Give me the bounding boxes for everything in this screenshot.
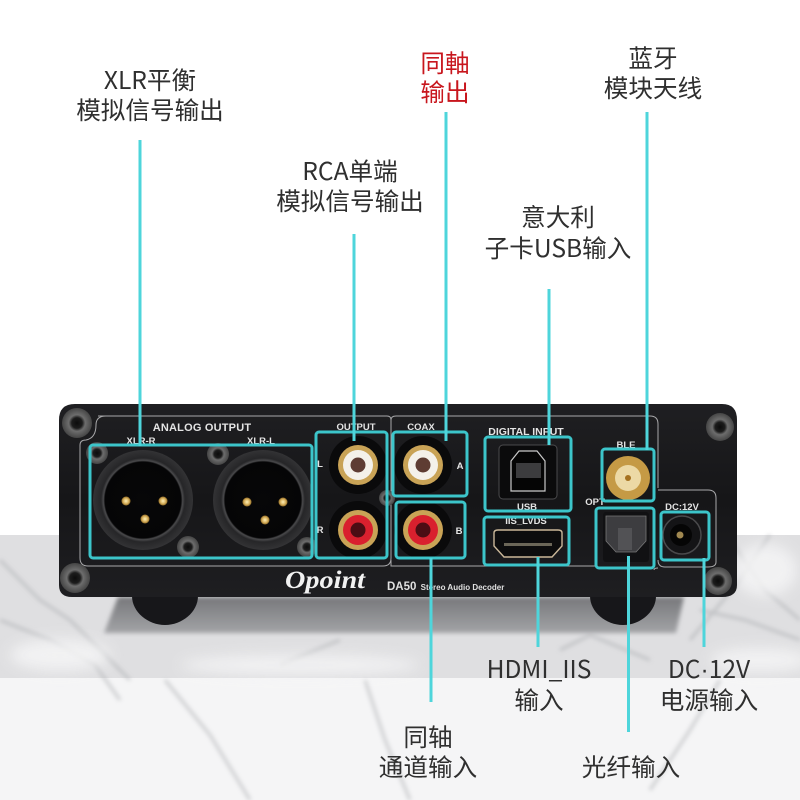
label: coaxial output: 同軸 [420, 44, 470, 80]
panel label: XLR-R: XLR-R [126, 436, 156, 447]
highlight box: USB [485, 437, 571, 511]
highlight box: XLR [90, 445, 312, 558]
leader line: XLR [138, 140, 142, 446]
label: XLR balanced output: XLR平衡 [104, 61, 196, 97]
highlight box: DC [661, 512, 709, 560]
foot: left [132, 596, 198, 625]
panel label: B: B [456, 526, 463, 537]
leader line: coax input [430, 558, 432, 702]
highlight box: BLE [602, 449, 654, 501]
highlight box: optical [596, 508, 654, 568]
panel label: analog output: ANALOG OUTPUT [153, 422, 251, 434]
leader line: DC [702, 558, 706, 647]
label: coaxial channel input: 同轴 [403, 718, 453, 754]
label: RCA single-ended output: RCA单端 [302, 152, 398, 188]
connector: HDMI [494, 530, 562, 557]
marble surface: back band [0, 535, 800, 800]
label: bluetooth antenna: 模块天线 [604, 69, 702, 105]
logo: Opoint: Opoint [285, 567, 366, 594]
panel label: A: A [457, 461, 464, 472]
leader line: RCA [352, 234, 356, 441]
label: Italian daughter-card USB input: 子卡USB输入 [485, 229, 631, 265]
highlight box: coax A [393, 432, 467, 496]
label: HDMI IIS input: HDMI_IIS [487, 650, 591, 686]
panel label: coax: COAX [407, 422, 435, 433]
background: white upper area [0, 0, 800, 535]
leader line: bluetooth [646, 112, 648, 450]
highlight box: RCA [316, 432, 387, 558]
connector: coax A [394, 436, 452, 494]
connector: RCA output L [329, 436, 387, 494]
leader line: coaxial output [444, 112, 448, 441]
highlight box: HDMI [484, 517, 569, 565]
panel label: IIS LVDS: IIS_LVDS [505, 516, 547, 527]
model name: DA50 Stereo Audio Decoder [387, 581, 504, 593]
panel label: XLR-L: XLR-L [247, 436, 275, 447]
label: coaxial output: 输出 [420, 73, 470, 109]
connector: XLR-R [93, 450, 193, 550]
connector: DC jack [663, 516, 701, 554]
label: RCA single-ended output: 模拟信号输出 [276, 182, 424, 218]
device body [59, 404, 737, 597]
label: optical input: 光纤输入 [582, 748, 680, 784]
screws: case and panel [60, 408, 734, 595]
panel label: OPT: OPT [585, 497, 605, 508]
leader line: optical [627, 556, 630, 732]
label: bluetooth antenna: 蓝牙 [628, 39, 678, 75]
label: DC 12V power input: DC·12V [668, 650, 750, 686]
connector: USB-B [499, 445, 557, 499]
label: Italian daughter-card USB input: 意大利 [521, 198, 595, 234]
foot: right [590, 596, 656, 625]
connector: optical [603, 512, 649, 562]
leader line: HDMI [536, 557, 540, 647]
highlight box: coax B [396, 502, 465, 558]
panel label: USB: USB [517, 502, 537, 513]
connector: RCA output R [329, 501, 387, 559]
panel label: output: OUTPUT [336, 422, 376, 433]
label: coaxial channel input: 通道输入 [379, 748, 477, 784]
panel label: L: L [317, 459, 323, 470]
leader line: USB [548, 289, 550, 445]
panel label: R: R [317, 525, 324, 536]
label: DC 12V power input: 电源输入 [660, 681, 758, 717]
label: XLR balanced output: 模拟信号输出 [76, 91, 224, 127]
connector: coax B [394, 501, 452, 559]
panel label: DC 12V: DC:12V [665, 502, 700, 513]
label: HDMI IIS input: 输入 [514, 681, 564, 717]
connector: XLR-L [213, 450, 313, 550]
connector: BLE SMA antenna [606, 456, 650, 500]
shadow under device [104, 597, 684, 633]
panel label: digital input: DIGITAL INPUT [488, 426, 564, 438]
panel label: BLE: BLE [616, 440, 636, 451]
silk-screen panel outline [80, 416, 716, 570]
